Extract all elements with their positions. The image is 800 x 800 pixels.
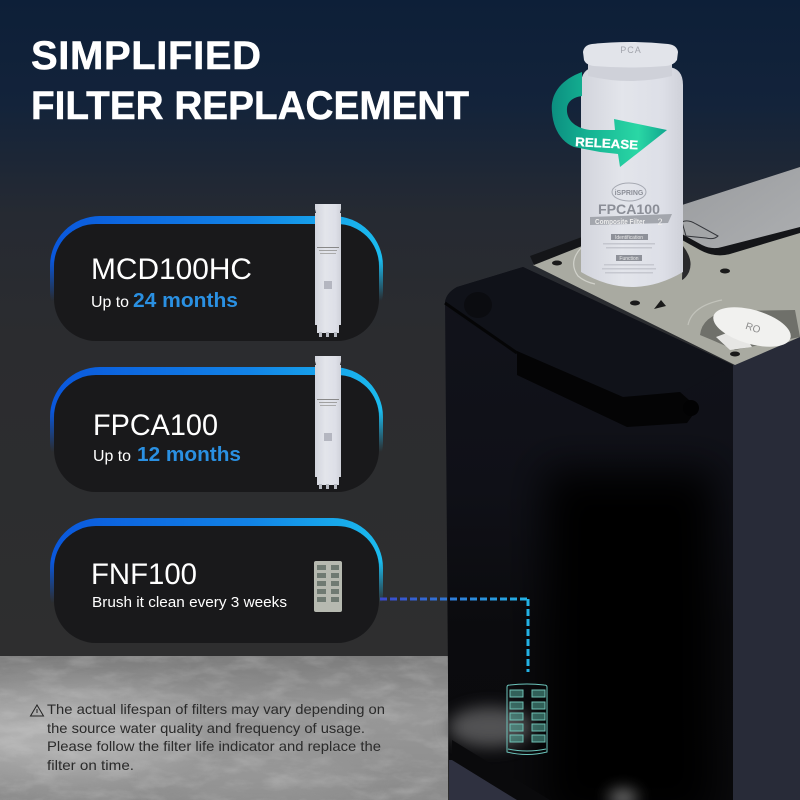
water purifier unit xyxy=(445,167,800,800)
front center shadow xyxy=(545,470,715,800)
label: iSPRING xyxy=(615,190,644,197)
panel: MCD100HC: 24 months xyxy=(133,290,238,312)
handle lip xyxy=(445,303,517,353)
title: SIMPLIFIED xyxy=(31,34,261,78)
handle band xyxy=(517,351,698,427)
large filter FPCA100 xyxy=(581,42,683,287)
title xyxy=(31,34,469,128)
mesh filter xyxy=(314,561,342,612)
base shelf xyxy=(448,707,637,800)
RO cap: RO xyxy=(744,321,762,336)
icon: warning triangle xyxy=(30,705,44,716)
label xyxy=(590,183,672,274)
filter well xyxy=(682,246,691,280)
bin interior xyxy=(445,267,733,397)
front shell xyxy=(445,267,733,800)
lid panel xyxy=(682,167,800,248)
model name: MCD100HC xyxy=(91,253,252,286)
concrete floor xyxy=(0,656,448,800)
disclaimer text xyxy=(47,701,385,773)
plate rear ledge xyxy=(530,237,582,265)
release arrow: RELEASE xyxy=(575,135,638,152)
disclaimer text: The actual lifespan of filters may vary depending on xyxy=(47,701,385,717)
panel: MCD100HC xyxy=(50,204,383,341)
top plate xyxy=(533,225,800,365)
label: Composite Filter xyxy=(595,219,645,226)
lid tab xyxy=(682,221,718,239)
lifespan: Up to xyxy=(93,448,131,465)
cleaning note: Brush it clean every 3 weeks xyxy=(92,594,287,611)
label: 2 xyxy=(657,217,663,227)
side panel xyxy=(733,337,800,800)
handle end cap xyxy=(683,400,699,416)
panel: FPCA100 xyxy=(50,356,383,492)
release arrow xyxy=(552,72,667,167)
disclaimer text: the source water quality and frequency of usage. xyxy=(47,720,365,736)
cap xyxy=(583,42,678,68)
plate markings xyxy=(552,260,740,356)
title: FILTER REPLACEMENT xyxy=(31,84,469,128)
large filter FPCA100: PCA xyxy=(620,45,642,55)
label: Function xyxy=(619,256,639,262)
model name: FPCA100 xyxy=(93,409,218,442)
lid shadow xyxy=(682,167,800,255)
filter cartridge xyxy=(315,356,341,489)
bin recess xyxy=(464,292,492,318)
dashed connector xyxy=(380,599,528,672)
label: Identification xyxy=(615,235,643,241)
panel: FPCA100: 12 months xyxy=(137,444,241,466)
RO port xyxy=(688,300,722,325)
filter cartridge xyxy=(315,204,341,337)
neck xyxy=(588,60,672,81)
panel: FNF100 xyxy=(50,518,383,643)
filter body xyxy=(581,67,683,287)
lifespan: Up to xyxy=(91,294,129,311)
model name: FNF100 xyxy=(91,558,197,591)
icon: filter location outline xyxy=(507,684,547,754)
disclaimer text: filter on time. xyxy=(47,757,134,773)
RO cap xyxy=(709,300,795,354)
disclaimer text: Please follow the filter life indicator and replace the xyxy=(47,738,381,754)
label: FPCA100 xyxy=(598,202,660,217)
